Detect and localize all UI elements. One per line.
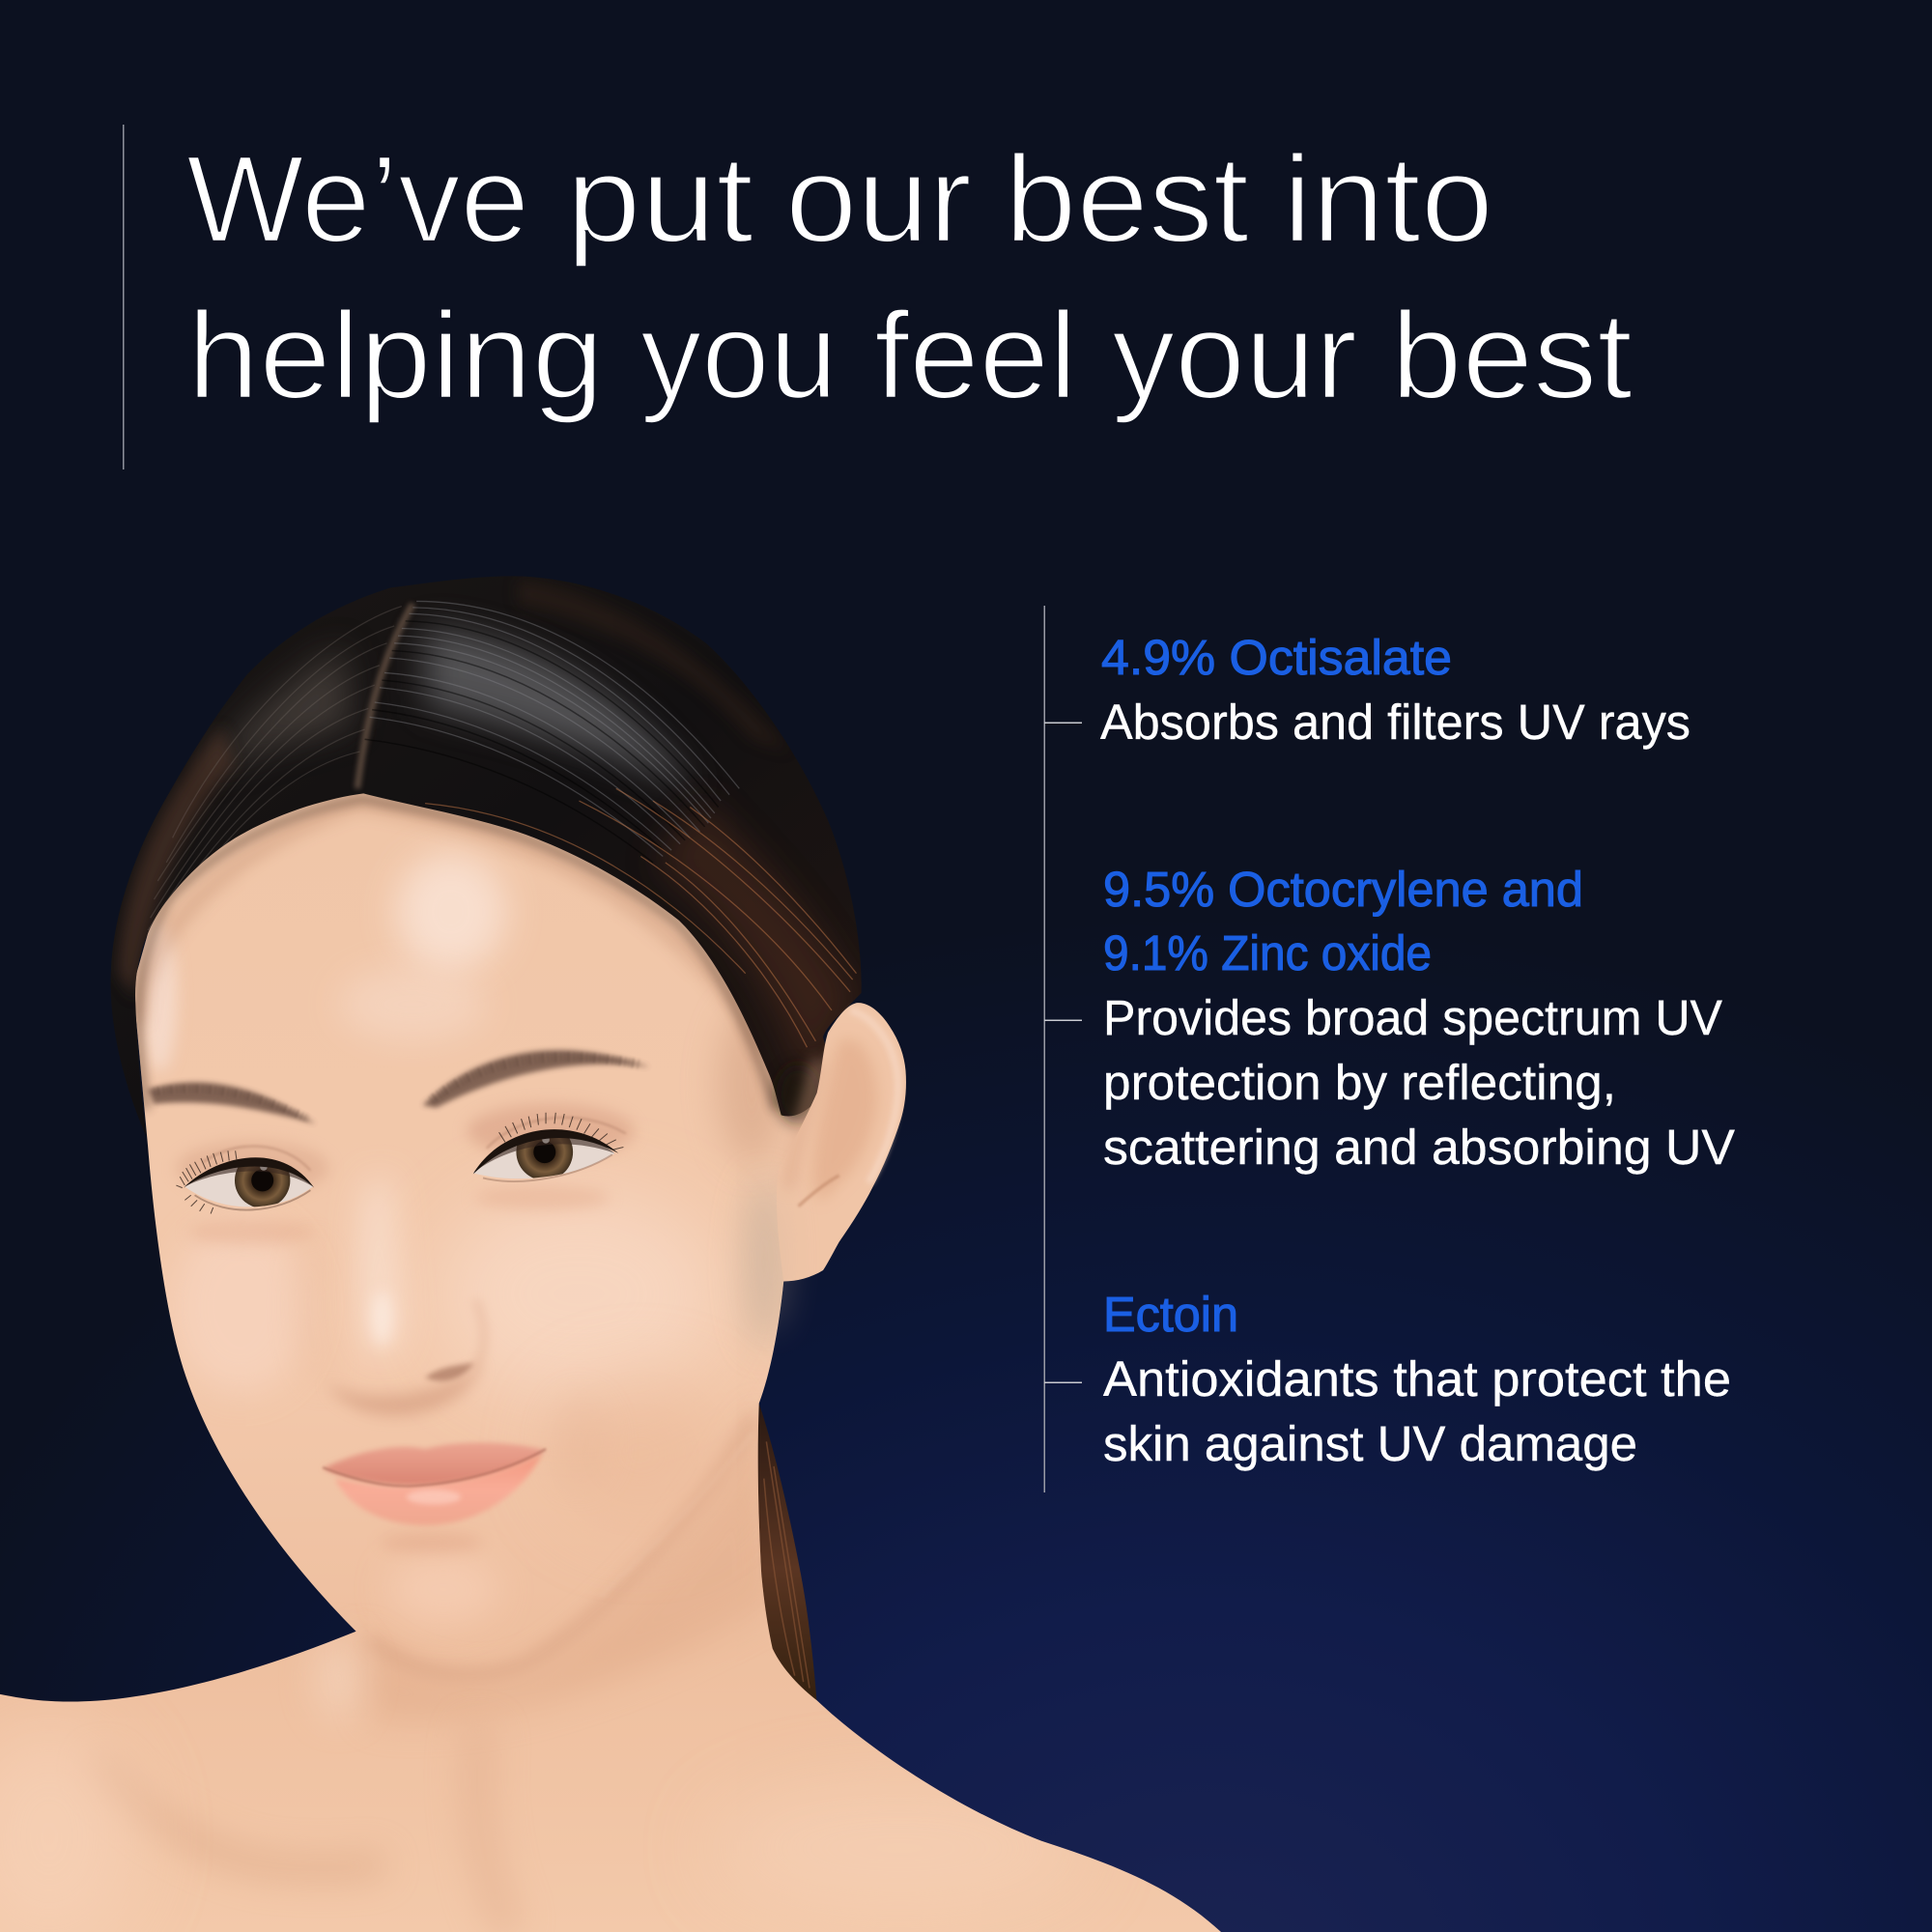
- mouth line: [323, 1449, 546, 1486]
- ear shape: [777, 1003, 906, 1282]
- ingredient: Octocrylene and Zinc oxide: 9.5% Octocrylene and: [1103, 862, 1583, 917]
- right eyeball: [462, 1109, 629, 1195]
- ear fold: [799, 1176, 839, 1207]
- mouth corner smile shade: [552, 1397, 607, 1486]
- tick three: [1044, 1381, 1082, 1383]
- hairline shadow: [138, 804, 764, 1047]
- right lower lid: [483, 1154, 612, 1181]
- left eyebrow: [148, 1082, 316, 1123]
- ingredient timeline: [1043, 606, 1082, 1492]
- nose: [308, 1177, 484, 1416]
- neck shadow under jaw: [373, 1443, 764, 1718]
- title: our: [785, 130, 972, 269]
- lips: [323, 1442, 546, 1525]
- left cheek glow: [163, 1238, 301, 1387]
- left lid crease: [203, 1147, 310, 1171]
- soft hair end behind ear: [777, 1065, 820, 1123]
- ingredient: Ectoin: skin against UV damage: [1103, 1416, 1637, 1471]
- cheek glow: [438, 1189, 721, 1399]
- left eye socket shade: [176, 1141, 329, 1195]
- hair: [111, 576, 862, 1137]
- sternum shadow: [471, 1766, 510, 1920]
- nose side shadow: [308, 1244, 327, 1382]
- sheen right: [425, 629, 696, 788]
- left lashes: [176, 1151, 237, 1213]
- gray strands: [370, 601, 739, 856]
- lower cheek shade: [599, 1389, 676, 1466]
- nose bridge highlight: [360, 1177, 401, 1355]
- nose tip highlight: [372, 1292, 392, 1346]
- title: you: [640, 287, 838, 425]
- hair base: [111, 576, 862, 1137]
- left strands: [142, 607, 402, 961]
- left eye: [173, 1133, 329, 1220]
- left catchlight: [260, 1163, 268, 1171]
- left lower lid: [195, 1190, 310, 1210]
- title: helping: [187, 287, 604, 425]
- left eyebrow hairs: [154, 1089, 308, 1119]
- title: We’ve: [186, 130, 529, 269]
- right lashes: [499, 1113, 623, 1150]
- ear base shade: [788, 1060, 818, 1189]
- tick two: [1044, 1020, 1082, 1021]
- temple shade: [717, 1005, 786, 1164]
- jaw edge shadow: [370, 1417, 754, 1674]
- left eyebrow base: [148, 1082, 316, 1123]
- hair details: [118, 579, 856, 1084]
- nose wing: [474, 1300, 484, 1370]
- title: best: [1391, 287, 1633, 425]
- right eyebrow hairs: [431, 1057, 640, 1100]
- ingredient: Octisalate: 4.9% Octisalate: [1101, 630, 1452, 685]
- vertical line: [1043, 606, 1045, 1492]
- lower lip: [335, 1454, 542, 1525]
- left eyeball: [173, 1133, 327, 1220]
- right eye socket shade: [467, 1104, 635, 1158]
- under-eye shadow right: [474, 1185, 610, 1210]
- ingredient: Octocrylene and Zinc oxide: 9.1% Zinc oxide: [1103, 925, 1432, 980]
- ponytail shape: [757, 1404, 817, 1703]
- crown brown tint: [518, 579, 788, 752]
- left pupil: [251, 1169, 273, 1191]
- skin: face, neck and shoulders: [0, 781, 1221, 1932]
- right catchlight: [542, 1136, 550, 1144]
- title: feel: [874, 287, 1077, 425]
- left lid shadow: [185, 1158, 313, 1186]
- soft hair fringe on skin: [138, 799, 777, 1109]
- upper lip: [323, 1442, 546, 1486]
- ear inner shade: [812, 1038, 878, 1202]
- title rule: [123, 125, 124, 469]
- right eye: [462, 1104, 635, 1195]
- right pupil: [533, 1141, 555, 1163]
- left iris: [235, 1152, 290, 1208]
- copper strands: [425, 788, 856, 1047]
- sheen left: [203, 647, 352, 777]
- ingredient: Ectoin: [1103, 1287, 1731, 1471]
- ingredient: Octocrylene and Zinc oxide: [1103, 862, 1735, 1175]
- lip shine: [407, 1490, 461, 1504]
- brow bone highlight: [339, 967, 487, 1041]
- ear rim: [850, 1010, 898, 1182]
- title: [186, 130, 1633, 425]
- chin highlight: [399, 1561, 489, 1621]
- under-eye shadow left: [188, 1220, 317, 1244]
- title: put: [566, 130, 753, 269]
- shoulder right light: [781, 1764, 1086, 1874]
- tick one: [1044, 723, 1082, 724]
- ingredient: Ectoin: Ectoin: [1103, 1287, 1238, 1342]
- nostril: [425, 1363, 474, 1380]
- skin shading: [0, 799, 1084, 1932]
- forehead highlight: [395, 853, 506, 971]
- right lid shadow: [473, 1132, 614, 1173]
- left neck highlight: [314, 1636, 363, 1720]
- cheek side shade: [744, 1177, 783, 1350]
- parting: [357, 604, 412, 788]
- cheek shade over ear join: [756, 1182, 786, 1331]
- jaw light line: [600, 1433, 753, 1597]
- lower right copper tint: [653, 801, 856, 1084]
- title: best: [1005, 130, 1249, 269]
- right eyebrow base: [422, 1050, 649, 1108]
- left temple highlight: [143, 924, 178, 1072]
- ingredient: Octisalate: Absorbs and filters UV rays: [1100, 695, 1690, 750]
- portrait of woman: [0, 576, 1221, 1932]
- dark strands: [365, 621, 719, 863]
- title: into: [1283, 130, 1493, 269]
- ingredient: Octocrylene and Zinc oxide: scattering and absorbing UV: [1103, 1120, 1735, 1175]
- right eyebrow: [422, 1050, 649, 1108]
- hair left brown tint: [118, 727, 234, 998]
- title: your: [1112, 287, 1357, 425]
- ingredient: Octocrylene and Zinc oxide: protection by reflecting,: [1103, 1055, 1616, 1110]
- right sclera: [462, 1109, 629, 1195]
- ingredient: Ectoin: Antioxidants that protect the: [1103, 1351, 1731, 1406]
- collarbone shadow left: [131, 1791, 375, 1884]
- nose underside shadow: [327, 1363, 483, 1416]
- ingredient: Octocrylene and Zinc oxide: Provides broad spectrum UV: [1103, 990, 1722, 1045]
- right lid crease: [487, 1118, 626, 1149]
- right upper lash line: [473, 1129, 618, 1175]
- ear: [756, 1003, 906, 1331]
- ponytail strands: [764, 1441, 810, 1688]
- ingredient: Octisalate: [1100, 630, 1690, 750]
- left upper lash line: [184, 1157, 314, 1188]
- under-lip shadow: [390, 1533, 473, 1553]
- shoulder left light: [0, 1739, 134, 1908]
- right iris: [516, 1123, 573, 1180]
- ponytail: [757, 1404, 817, 1703]
- left sclera: [173, 1133, 327, 1220]
